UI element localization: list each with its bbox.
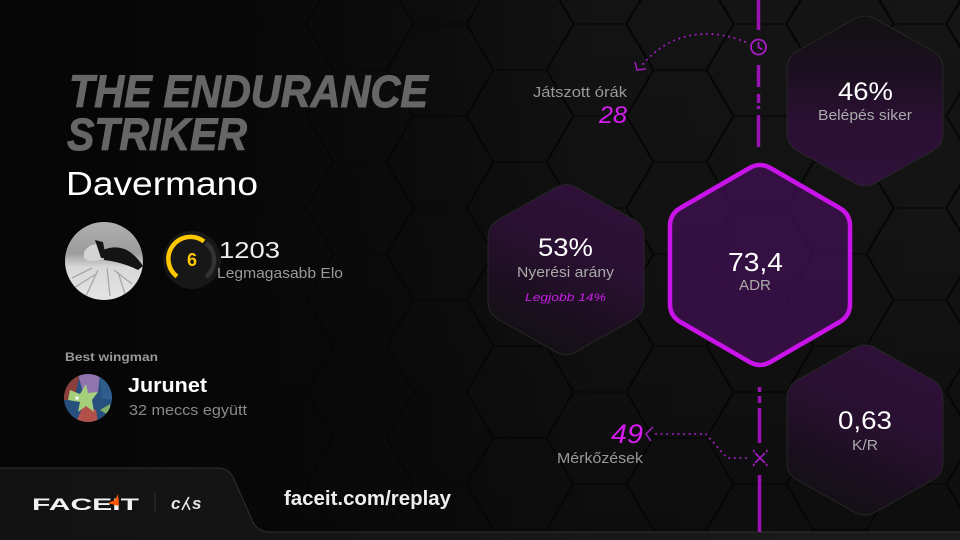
- wingman name and matches: 32 meccs együtt: [129, 403, 247, 419]
- wingman avatar: [64, 374, 112, 422]
- hours played label: Játszott órák: [533, 85, 628, 101]
- icon: crossed marker: [753, 451, 768, 465]
- panel: entry success: [787, 16, 943, 186]
- FACEIT logo: [32, 494, 139, 514]
- panel: entry success: 46%: [838, 78, 893, 106]
- matches label: Mérkőzések: [557, 451, 644, 467]
- title: archetype name: STRIKER: [67, 109, 247, 160]
- icon: clock: [751, 40, 766, 54]
- highest elo: [217, 237, 343, 282]
- counter-strike logo: s: [192, 494, 201, 513]
- best wingman label: Best wingman: [65, 352, 158, 364]
- wingman name and matches: [128, 375, 247, 419]
- title: archetype name: [67, 66, 430, 160]
- faceit level badge: [163, 231, 221, 289]
- title: archetype name: THE ENDURANCE: [69, 66, 430, 117]
- FACEIT logo: FACEIT: [32, 496, 139, 514]
- counter-strike logo: c: [171, 494, 181, 513]
- dotted arrow to matches: [646, 427, 750, 458]
- panel: win rate: Nyerési arány: [517, 265, 615, 281]
- footer bar: [0, 468, 960, 540]
- replay url: faceit.com/replay: [284, 488, 452, 510]
- timeline lower: [758, 387, 761, 532]
- wingman name and matches: Jurunet: [128, 375, 207, 397]
- timeline upper: [757, 0, 760, 147]
- panel: win rate: [488, 184, 644, 355]
- panel: ADR highlight: [670, 165, 850, 365]
- panel: ADR highlight: 73,4: [728, 247, 783, 277]
- counter-strike logo: [155, 493, 201, 513]
- hours played value: 28: [598, 102, 628, 129]
- panel: ADR highlight: ADR: [739, 277, 771, 294]
- panel: K/R: K/R: [852, 438, 878, 454]
- highest elo: 1203: [219, 237, 280, 263]
- panel: win rate: Legjobb 14%: [525, 292, 606, 304]
- player avatar: [65, 222, 143, 300]
- panel: K/R: [787, 345, 943, 515]
- dotted arrow to hours played: [635, 34, 745, 70]
- matches value: 49: [611, 419, 643, 449]
- panel: entry success: Belépés siker: [818, 108, 912, 124]
- player name: Davermano: [66, 165, 258, 202]
- highest elo: Legmagasabb Elo: [217, 265, 343, 282]
- panel: K/R: 0,63: [838, 407, 892, 435]
- panel: win rate: 53%: [538, 234, 593, 262]
- faceit level badge: 6: [187, 250, 197, 270]
